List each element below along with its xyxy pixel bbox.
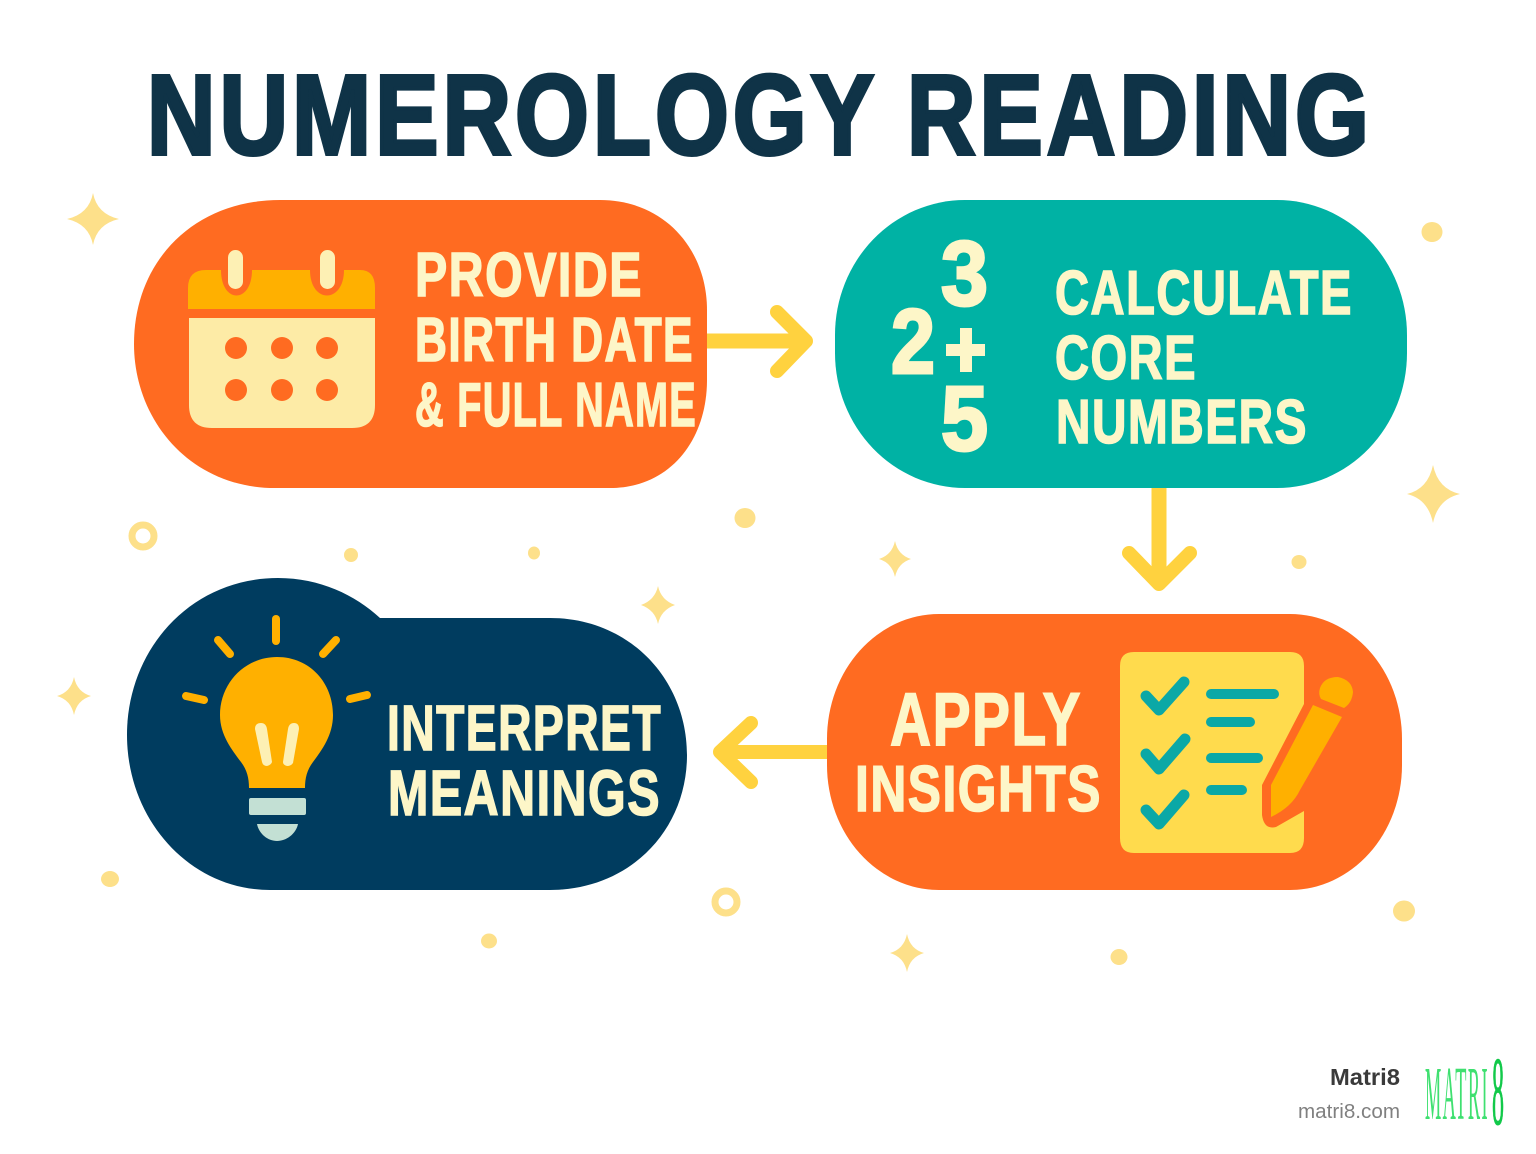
arrow: step 2 to step 3: [1129, 480, 1190, 584]
text: calculate core numbers: CALCULATE: [1055, 259, 1353, 328]
text: calculate core numbers: CORE: [1055, 324, 1197, 393]
panel: provide birth date: [134, 200, 707, 488]
icon: sum of numbers: 3: [941, 223, 988, 325]
background sparkles and dots: [57, 193, 1460, 972]
text: provide birth date and full name: [415, 241, 697, 440]
text: interpret meanings: [387, 692, 662, 829]
panel: calculate core numbers: [835, 200, 1407, 488]
arrow: step 3 to step 4: [720, 723, 835, 782]
text: apply insights: INSIGHTS: [855, 752, 1102, 825]
text: calculate core numbers: [1055, 259, 1353, 457]
text: calculate core numbers: NUMBERS: [1056, 388, 1308, 457]
footer logo: [1425, 1038, 1504, 1146]
icon: sum of numbers: 2: [891, 291, 935, 393]
icon: sum of numbers: [891, 223, 988, 470]
panel: apply insights: [827, 614, 1402, 890]
icon: checklist and pencil: [1120, 652, 1353, 853]
text: provide birth date and full name: & FULL NAME: [415, 371, 697, 440]
text: interpret meanings: MEANINGS: [388, 757, 661, 829]
text: interpret meanings: INTERPRET: [387, 692, 662, 764]
footer brand text: Matri8: [1330, 1064, 1400, 1090]
text: provide birth date and full name: BIRTH DATE: [415, 306, 694, 375]
text: apply insights: APPLY: [890, 677, 1082, 761]
arrow: step 1 to step 2: [700, 312, 806, 371]
icon: calendar: [188, 250, 375, 428]
panel: interpret meanings: [127, 578, 687, 890]
footer brand text: [1298, 1064, 1400, 1123]
text: apply insights: [855, 677, 1102, 825]
footer brand text: matri8.com: [1298, 1101, 1400, 1123]
icon: light bulb: [186, 619, 367, 841]
text: provide birth date and full name: PROVIDE: [415, 241, 643, 310]
icon: sum of numbers: 5: [941, 368, 988, 470]
